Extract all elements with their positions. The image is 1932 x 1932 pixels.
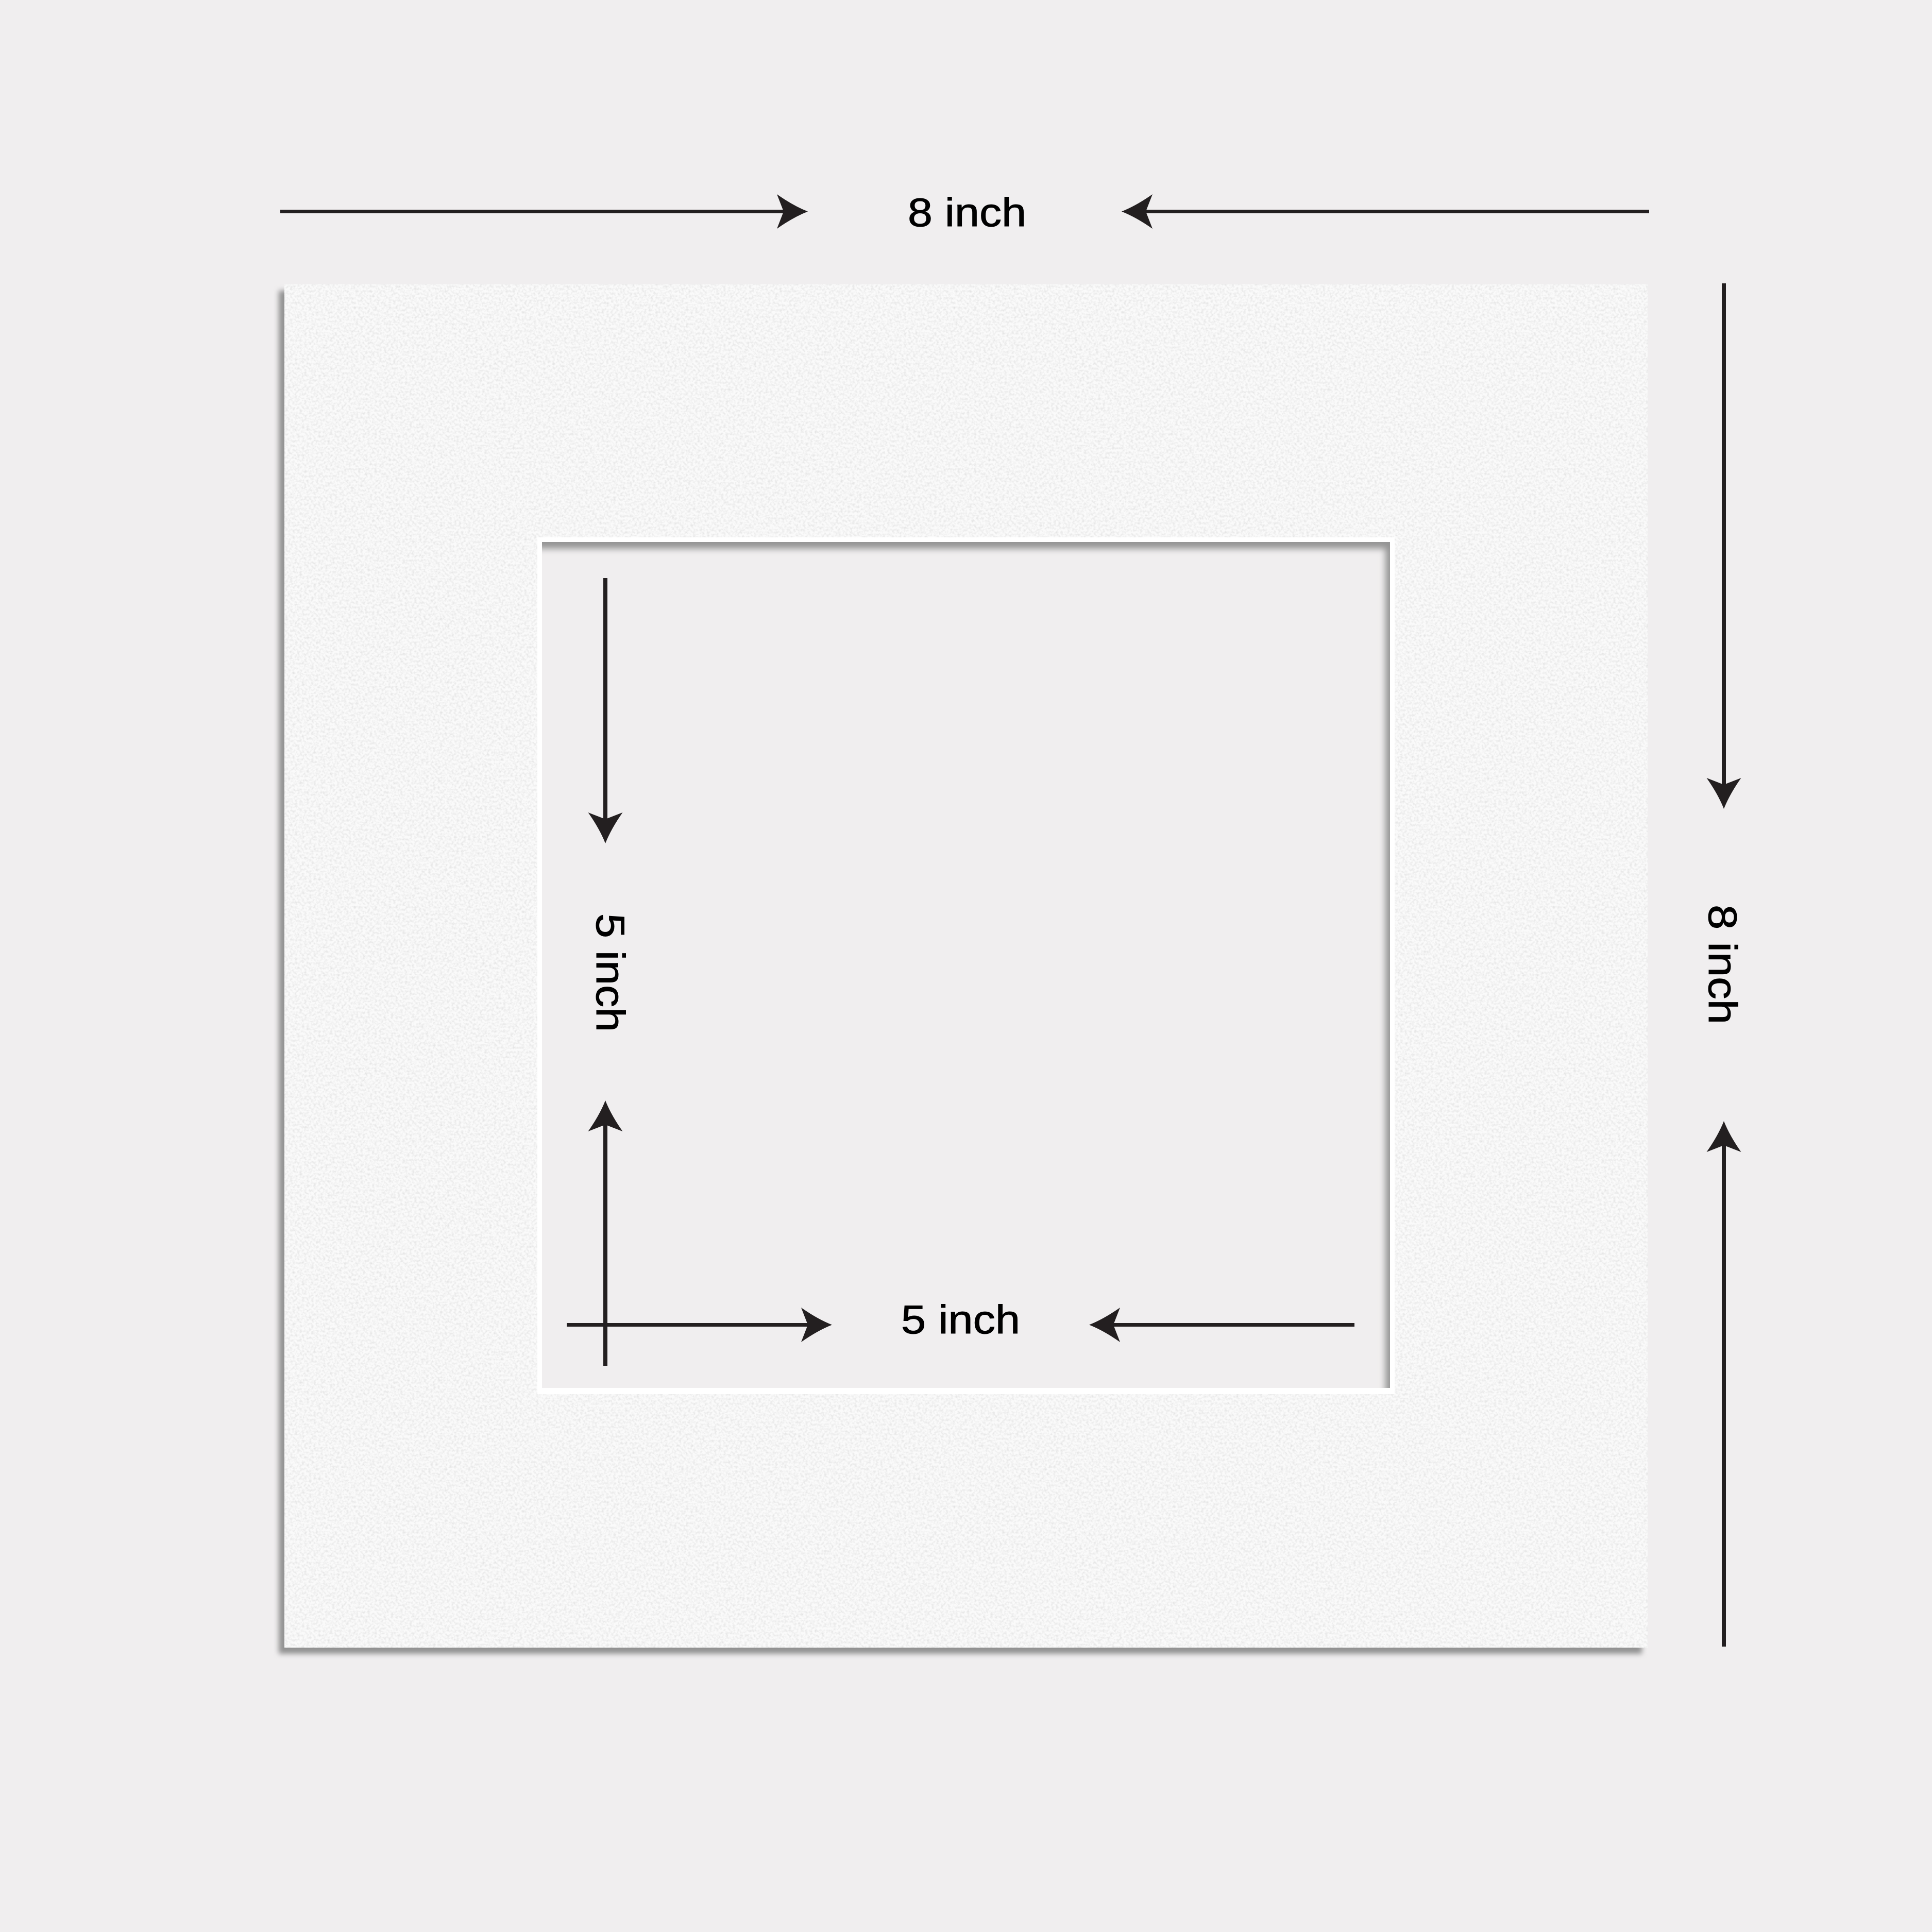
infographic: mat board dimensions (275, 194, 1741, 1657)
arrow: window bottom, pointing right (567, 1308, 832, 1342)
arrow: window bottom, pointing left (1089, 1308, 1354, 1342)
label: right height 8 inch: 8 inch (1700, 905, 1745, 1024)
arrow: window left, pointing up (588, 1100, 622, 1366)
label: window width 5 inch: 5 inch (901, 1297, 1020, 1342)
mat surface (284, 284, 1648, 1648)
mat drop shadow (279, 291, 1642, 1654)
arrow: right side, pointing down (1706, 283, 1741, 809)
window inner shadow (531, 531, 1401, 1396)
window opening (542, 542, 1390, 1388)
window white bevel (537, 537, 1395, 1394)
label: window height 5 inch: 5 inch (588, 913, 633, 1032)
panel: white mat board with window (279, 284, 1648, 1654)
label: top width 8 inch: 8 inch (908, 190, 1026, 235)
arrow: top left, pointing right (280, 194, 808, 229)
arrow: right side, pointing up (1706, 1121, 1741, 1647)
mat paper grain (284, 284, 1648, 1648)
arrow: window left, pointing down (588, 578, 622, 843)
arrow: top right, pointing left (1122, 194, 1649, 229)
